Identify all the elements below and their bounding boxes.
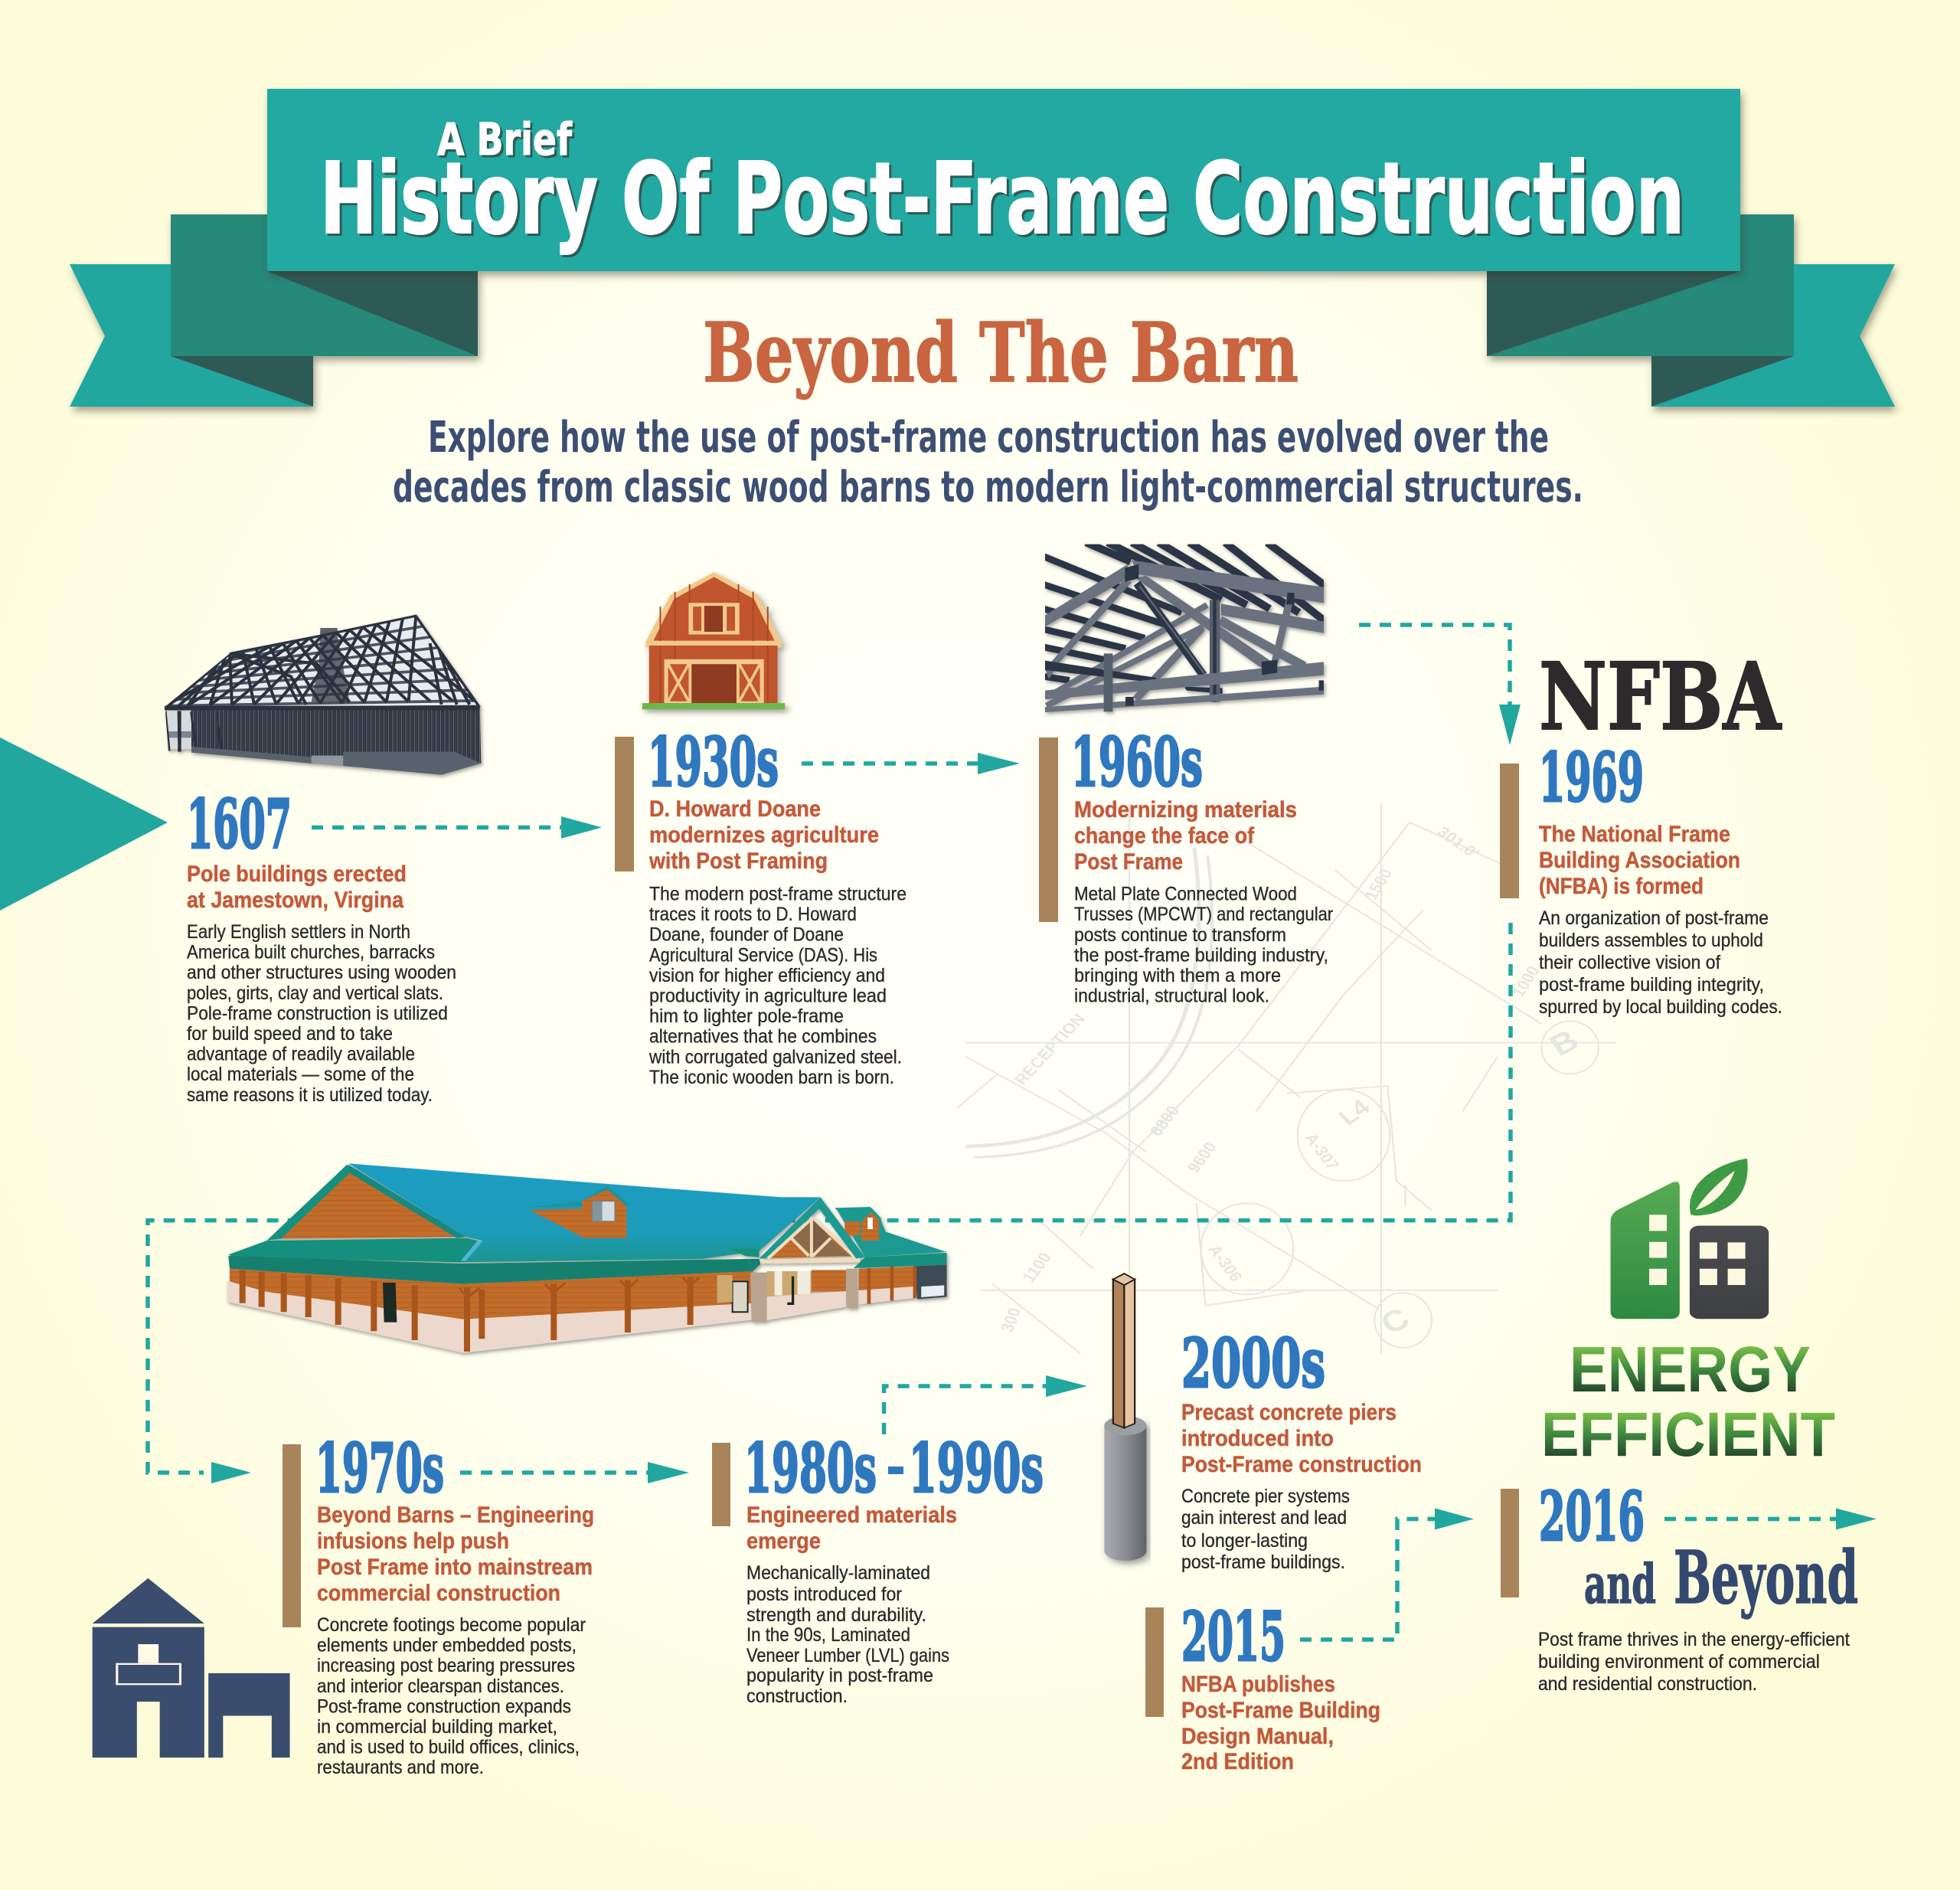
heading 1607: Pole buildings erected xyxy=(187,862,407,887)
body 2016: and residential construction. xyxy=(1538,1673,1757,1695)
body 1607 xyxy=(187,921,456,1106)
body 2016: building environment of commercial xyxy=(1538,1651,1820,1673)
year 1969: 1969 xyxy=(1539,737,1644,817)
panel: 2015 xyxy=(1145,1509,1474,1774)
year 1930s: 1930s xyxy=(648,722,779,802)
body 1960s: industrial, structural look. xyxy=(1074,985,1269,1006)
heading 1980s: Engineered materials xyxy=(746,1503,957,1528)
body 1930s: Doane, founder of Doane xyxy=(649,924,844,946)
arrow: 1980s to 2000s xyxy=(884,1375,1087,1434)
heading 1970s: Post Frame into mainstream xyxy=(317,1555,593,1580)
icon: navy buildings xyxy=(93,1578,290,1758)
body 2016 xyxy=(1538,1629,1850,1695)
heading 2015: Post-Frame Building xyxy=(1181,1698,1380,1723)
body 1607: advantage of readily available xyxy=(187,1044,415,1065)
arrow: 1970s to 1980s xyxy=(460,1462,689,1483)
body 1960s: posts continue to transform xyxy=(1074,924,1286,946)
image: commercial post-frame building xyxy=(227,1163,947,1353)
heading 1930s: with Post Framing xyxy=(648,849,828,874)
body 1607: same reasons it is utilized today. xyxy=(187,1084,433,1106)
bar 2015 xyxy=(1145,1607,1164,1717)
panel: 1930s xyxy=(615,722,1020,1088)
image: post in concrete pier xyxy=(1104,1274,1146,1561)
arrow: 1607 to 1930s xyxy=(312,816,602,839)
arrow: 1930s to 1960s xyxy=(802,753,1020,774)
body 1980s: strength and durability. xyxy=(746,1604,926,1626)
body 1930s: Agricultural Service (DAS). His xyxy=(649,944,877,966)
blueprint drawing: RECEPTION xyxy=(1011,1011,1089,1088)
body 1969: post-frame building integrity, xyxy=(1539,974,1764,996)
body 1930s xyxy=(648,884,906,1088)
heading 1930s xyxy=(648,796,879,874)
body 1930s: traces it roots to D. Howard xyxy=(649,904,857,925)
body 1970s: increasing post bearing pressures xyxy=(317,1655,575,1676)
body 1970s: in commercial building market, xyxy=(317,1716,557,1738)
body 1970s: elements under embedded posts, xyxy=(317,1635,577,1656)
body 1970s: and is used to build offices, clinics, xyxy=(317,1737,580,1758)
body 2000s: gain interest and lead xyxy=(1181,1507,1347,1529)
body 1980s: Veneer Lumber (LVL) gains xyxy=(746,1645,949,1666)
body 1970s: Concrete footings become popular xyxy=(317,1614,586,1636)
heading 2000s: Post-Frame construction xyxy=(1181,1452,1422,1477)
year 1960s: 1960s xyxy=(1071,722,1203,802)
body 2000s: post-frame buildings. xyxy=(1181,1552,1345,1573)
main dormer xyxy=(523,1185,632,1208)
arrow: 1969 to 1970s xyxy=(148,923,1511,1483)
body 1969: builders assembles to uphold xyxy=(1539,930,1763,951)
bar 1980s xyxy=(712,1443,730,1526)
panel: 2016 and beyond xyxy=(1501,1476,1877,1695)
body 1930s: productivity in agriculture lead xyxy=(649,985,887,1006)
heading 1607: at Jamestown, Virgina xyxy=(187,888,403,913)
and Beyond xyxy=(1584,1535,1858,1620)
image: timber frame building xyxy=(165,616,481,775)
arrow: 2016 onward xyxy=(1664,1509,1877,1530)
heading 1607 xyxy=(187,862,407,913)
body 1960s: Trusses (MPCWT) and rectangular xyxy=(1074,904,1333,925)
heading 1969 xyxy=(1539,822,1740,899)
main roof xyxy=(348,1163,821,1262)
body 1607: and other structures using wooden xyxy=(187,962,456,983)
body 1930s: with corrugated galvanized steel. xyxy=(648,1046,902,1068)
body 1607: local materials — some of the xyxy=(187,1064,414,1085)
right wall xyxy=(463,1271,753,1319)
year 1970s: 1970s xyxy=(315,1428,444,1508)
heading 1960s: Modernizing materials xyxy=(1074,797,1297,822)
image: red barn icon xyxy=(642,572,785,709)
bar 1970s xyxy=(283,1444,301,1627)
bar 2016 xyxy=(1501,1489,1519,1597)
body 1969: An organization of post-frame xyxy=(1539,907,1769,929)
body 1980s: Mechanically-laminated xyxy=(746,1562,930,1584)
heading 1970s: infusions help push xyxy=(317,1529,509,1554)
body 1980s xyxy=(746,1562,949,1707)
heading 1930s: D. Howard Doane xyxy=(649,796,821,822)
heading 1969: (NFBA) is formed xyxy=(1539,874,1704,899)
body 1980s: popularity in post-frame xyxy=(746,1665,933,1686)
heading: ENERGY: ENERGY xyxy=(1570,1333,1811,1405)
heading 1970s xyxy=(317,1503,594,1606)
year 1980s-1990s: 1990s xyxy=(909,1428,1044,1508)
start triangle xyxy=(0,737,168,911)
heading 2000s: Precast concrete piers xyxy=(1181,1400,1396,1425)
body 1970s: and interior clearspan distances. xyxy=(317,1676,564,1697)
panel: 1969 xyxy=(1500,737,1782,1018)
body 2000s xyxy=(1181,1486,1350,1573)
far right wing xyxy=(835,1207,947,1304)
blueprint drawing: 1100 xyxy=(1019,1250,1056,1286)
body 1960s: Metal Plate Connected Wood xyxy=(1074,884,1297,905)
year 1607: 1607 xyxy=(187,784,292,864)
bar 1969 xyxy=(1500,764,1519,898)
and Beyond: and xyxy=(1584,1552,1656,1616)
body 1930s: The iconic wooden barn is born. xyxy=(649,1067,894,1088)
heading: EFFICIENT: EFFICIENT xyxy=(1541,1400,1835,1470)
blueprint drawing: A-306 xyxy=(1204,1242,1246,1284)
body 1607: Early English settlers in North xyxy=(187,921,410,943)
panel: 1970s xyxy=(283,1428,689,1778)
blueprint drawing: C xyxy=(1374,1302,1416,1340)
body 1969: their collective vision of xyxy=(1539,952,1720,973)
intro tagline xyxy=(393,413,1583,512)
body 1970s: Post-frame construction expands xyxy=(317,1695,571,1717)
heading 1980s xyxy=(746,1503,957,1554)
arrow: 1960s to 1969 xyxy=(1359,625,1521,745)
heading 2015 xyxy=(1181,1672,1380,1774)
body 1607: poles, girts, clay and vertical slats. xyxy=(187,983,443,1004)
heading 1980s: emerge xyxy=(746,1529,821,1554)
heading 2015: Design Manual, xyxy=(1181,1724,1334,1749)
blueprint drawing: L4 xyxy=(1333,1094,1376,1130)
body 2016: Post frame thrives in the energy-efficient xyxy=(1538,1629,1850,1650)
icon: energy efficient buildings xyxy=(1611,1159,1769,1319)
blueprint drawing xyxy=(957,804,1616,1353)
panel: 1607 xyxy=(187,784,602,1106)
blueprint drawing: 300 xyxy=(998,1306,1025,1334)
bar 1930s xyxy=(615,737,634,871)
body 1970s xyxy=(317,1614,586,1778)
body 1930s: him to lighter pole-frame xyxy=(649,1005,844,1027)
year 2015: 2015 xyxy=(1181,1597,1285,1676)
year 2000s: 2000s xyxy=(1181,1323,1325,1403)
year 2016: 2016 xyxy=(1539,1476,1645,1556)
body 1980s: posts introduced for xyxy=(746,1584,902,1605)
body 2000s: Concrete pier systems xyxy=(1181,1486,1350,1507)
gable xyxy=(281,1172,457,1238)
heading 1969: The National Frame xyxy=(1539,822,1730,847)
body 1930s: vision for higher efficiency and xyxy=(649,965,885,986)
blueprint drawing: 1500 xyxy=(1361,866,1396,903)
heading 1969: Building Association xyxy=(1539,848,1740,873)
body 1960s xyxy=(1074,884,1333,1006)
body 2000s: to longer-lasting xyxy=(1181,1530,1308,1552)
lower roof and fascia xyxy=(228,1238,482,1262)
heading 1960s: change the face of xyxy=(1074,823,1255,849)
year 1980s-1990s: 1980s xyxy=(744,1428,877,1508)
blueprint drawing: A-307 xyxy=(1301,1130,1342,1173)
right ribbon tail xyxy=(1487,214,1895,407)
blueprint drawing: 1000 xyxy=(1508,963,1544,999)
heading 1930s: modernizes agriculture xyxy=(649,822,879,848)
body 1607: America built churches, barracks xyxy=(187,942,435,963)
panel: 1960s xyxy=(1039,722,1333,1006)
subtitle: Beyond The Barn: Beyond The Barn xyxy=(703,306,1298,401)
blueprint drawing: 6800 xyxy=(1146,1103,1184,1139)
blueprint drawing: 9600 xyxy=(1184,1140,1220,1176)
heading 1970s: Beyond Barns – Engineering xyxy=(317,1503,594,1528)
main banner xyxy=(267,89,1740,271)
heading 1960s xyxy=(1074,797,1297,875)
banner ribbon xyxy=(70,89,1895,407)
body 1930s: alternatives that he combines xyxy=(649,1026,877,1048)
logo: NFBA: NFBA xyxy=(1539,642,1782,751)
body 1930s: The modern post-frame structure xyxy=(649,884,906,905)
body 1960s: the post-frame building industry, xyxy=(1074,945,1328,966)
body 1607: for build speed and to take xyxy=(187,1023,393,1045)
bar 1960s xyxy=(1039,737,1058,922)
body 1980s: In the 90s, Laminated xyxy=(746,1624,910,1646)
body 1969 xyxy=(1539,907,1782,1018)
title: A Brief: A Brief xyxy=(437,113,573,165)
arrow: 2015 to 2016 xyxy=(1300,1509,1474,1640)
panel: 1980s-1990s xyxy=(712,1375,1087,1707)
blueprint drawing: B xyxy=(1544,1023,1585,1062)
heading 2015: 2nd Edition xyxy=(1181,1749,1294,1774)
left ribbon tail xyxy=(70,214,478,407)
body 1960s: bringing with them a more xyxy=(1074,965,1281,986)
door and posts xyxy=(383,1283,397,1323)
heading 1960s: Post Frame xyxy=(1074,849,1183,875)
heading 2000s xyxy=(1181,1400,1422,1477)
body 1969: spurred by local building codes. xyxy=(1539,996,1782,1018)
body 1607: Pole-frame construction is utilized xyxy=(187,1002,448,1024)
entry xyxy=(733,1281,748,1312)
heading 2015: NFBA publishes xyxy=(1181,1672,1335,1697)
panel: 2000s xyxy=(1181,1323,1422,1573)
blueprint drawing: 301.0' xyxy=(1433,824,1482,862)
body 1980s: construction. xyxy=(746,1686,848,1707)
left wall xyxy=(230,1269,463,1319)
body 1970s: restaurants and more. xyxy=(317,1757,484,1778)
heading 1970s: commercial construction xyxy=(317,1581,560,1606)
image: metal plate truss xyxy=(1044,542,1327,712)
heading 2000s: introduced into xyxy=(1181,1426,1334,1451)
